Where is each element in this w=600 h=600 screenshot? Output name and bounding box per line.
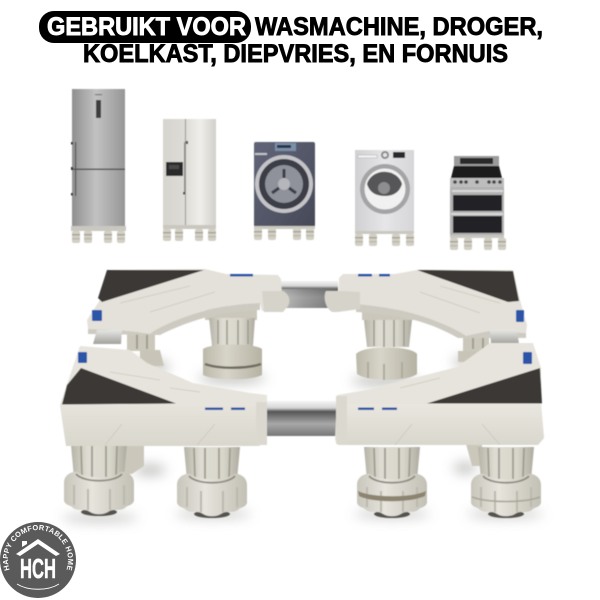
front right foot bbox=[471, 447, 541, 518]
front right rubber pad bbox=[427, 368, 542, 404]
left grey slider bbox=[93, 330, 122, 344]
appliance: bottom freezer fridge bbox=[71, 89, 126, 243]
back right rubber pad bbox=[417, 270, 519, 302]
logo HCH monogram: HCH bbox=[20, 553, 56, 584]
front left arm bbox=[60, 346, 267, 446]
title line 1: WASMACHINE, DROGER, bbox=[255, 13, 543, 41]
front left rubber pad bbox=[62, 368, 176, 404]
appliance: range stove bbox=[450, 156, 506, 250]
back left arm bbox=[87, 269, 289, 335]
right grey slider bbox=[490, 330, 519, 344]
back left foot bbox=[203, 306, 262, 380]
front left foot bbox=[64, 445, 134, 516]
logo ring text: HAPPY COMFORTABLE HOME bbox=[2, 524, 74, 571]
appliance: dryer bbox=[355, 150, 414, 246]
back inner front right foot bbox=[466, 444, 482, 466]
back inner front left foot bbox=[124, 444, 144, 474]
back right arm bbox=[325, 270, 527, 338]
front middle right foot bbox=[357, 447, 427, 518]
back right inner foot bbox=[458, 327, 489, 362]
back right foot bbox=[356, 304, 417, 380]
back left inner foot bbox=[127, 327, 164, 366]
title bbox=[39, 11, 543, 68]
back crossbar tube bbox=[278, 281, 338, 308]
front crossbar tube bbox=[265, 401, 337, 436]
front middle left foot bbox=[177, 447, 247, 518]
back left rubber pad bbox=[98, 270, 204, 302]
title line 2: KOELKAST, DIEPVRIES, EN FORNUIS bbox=[83, 40, 508, 68]
appliance: side by side fridge bbox=[163, 119, 216, 241]
floor shadows bbox=[62, 356, 543, 522]
blue adjustment tabs bbox=[78, 274, 532, 410]
logo bottom flourish bbox=[17, 584, 59, 589]
product: adjustable appliance base bbox=[60, 269, 544, 522]
logo: happy comfortable home badge bbox=[0, 522, 76, 598]
logo house roof bbox=[16, 539, 60, 556]
front right arm bbox=[335, 343, 544, 445]
title badge: gebruikt voor: GEBRUIKT VOOR bbox=[47, 13, 246, 41]
appliance: front load washer bbox=[254, 142, 315, 240]
